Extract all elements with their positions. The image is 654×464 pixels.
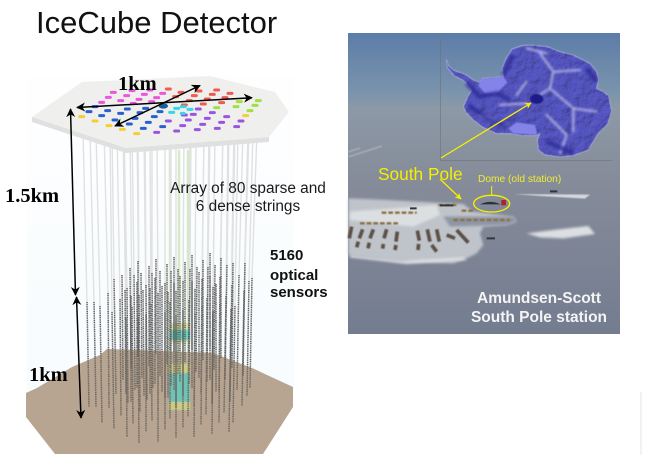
red dots [166, 89, 232, 105]
continent outline [446, 45, 612, 157]
label: Dome: Dome (old station) [478, 174, 561, 185]
darker regions [467, 55, 597, 153]
South Pole dark spot [530, 94, 543, 104]
arrow: to pole on map [441, 103, 531, 158]
pale ice background [27, 76, 294, 396]
ice shelves [478, 77, 537, 135]
label: South Pole: South Pole [378, 164, 463, 184]
label: optical sensors: optical [270, 267, 318, 284]
ice texture streaks [348, 146, 382, 157]
label: 1km top: 1km [118, 73, 157, 95]
title: IceCube Detector [36, 5, 277, 40]
station aerial view [348, 186, 595, 264]
connector line [490, 186, 493, 195]
panel: IceCube detector diagram [5, 73, 328, 454]
magenta dots [100, 90, 165, 103]
central station marker [159, 103, 168, 109]
green dots [215, 101, 260, 111]
strings: upper cable section [83, 130, 257, 318]
dark machinery [410, 191, 557, 238]
bright snow patches [350, 205, 595, 264]
panel: South Pole photo [348, 33, 620, 334]
photo caption: Amundsen-Scott [477, 290, 601, 307]
thin map frame lines [440, 39, 612, 160]
photo caption: South Pole station [471, 309, 607, 326]
faint edge line [640, 392, 642, 455]
label: array of strings: 6 dense strings [196, 198, 300, 215]
yellow dots [80, 116, 248, 134]
station buildings [360, 205, 510, 223]
yellow ellipse [474, 195, 510, 212]
label: array of strings: Array of 80 sparse and [170, 180, 326, 197]
building rows [349, 227, 468, 252]
surface station dots [80, 89, 260, 134]
dense core column [169, 150, 190, 410]
label: optical sensors: sensors [270, 284, 328, 301]
purple dots [155, 109, 243, 132]
arrow: to station [440, 179, 461, 199]
surface platform side [32, 117, 269, 153]
horizon ice strip [513, 194, 590, 199]
label: 1km bottom: 1km [29, 364, 68, 386]
arrow: 1km diagonal [115, 86, 200, 126]
arrow: 1.5km depth [70, 109, 76, 295]
arrow: 1km instrumented depth [76, 297, 81, 418]
ice ridges [480, 48, 597, 153]
grey road apron [443, 217, 517, 227]
translucent ground overlay on strings [26, 349, 293, 454]
bedrock ground [26, 349, 293, 454]
cyan dots [170, 107, 192, 113]
strings: sensor section [87, 253, 252, 443]
arrow: 1km width [77, 98, 252, 108]
Antarctica map [446, 45, 612, 157]
blue dots [87, 107, 165, 128]
label: 1.5km: 1.5km [5, 185, 59, 207]
photo background [348, 33, 620, 334]
surface platform top [32, 76, 289, 148]
dome [480, 202, 501, 204]
red building [501, 200, 506, 205]
label: optical sensors: 5160 [270, 247, 303, 264]
snow field [348, 198, 517, 263]
